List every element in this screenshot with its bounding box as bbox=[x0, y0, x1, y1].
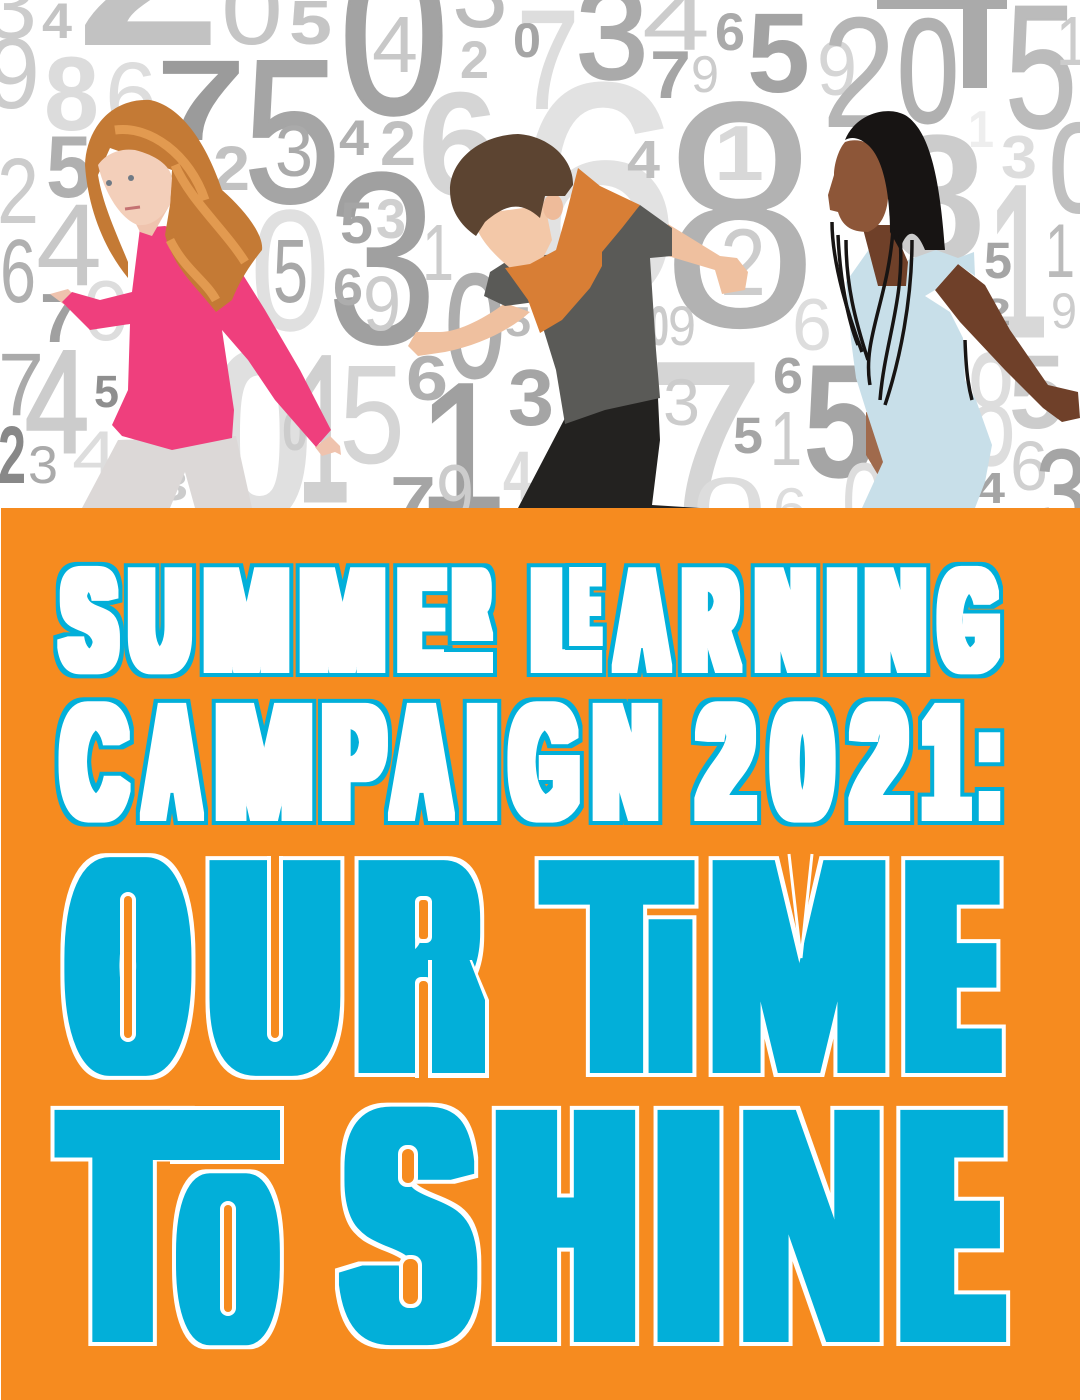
orange scarf bbox=[505, 168, 640, 333]
photo background: scattered numbers: 6 bbox=[333, 259, 363, 317]
white leggings bbox=[82, 436, 252, 508]
title: To Shine: O bbox=[190, 1132, 266, 1385]
heading line: Campaign 2021:: N bbox=[595, 672, 656, 851]
heading line: Summer Learning: R bbox=[457, 551, 486, 658]
photo background: scattered numbers bbox=[0, 0, 1080, 572]
photo background: scattered numbers: 5 bbox=[984, 232, 1012, 289]
photo background: scattered numbers: 8 bbox=[890, 98, 985, 299]
photo background: scattered numbers: 7 bbox=[650, 316, 762, 568]
heading line: Campaign 2021:: 2 bbox=[853, 672, 906, 851]
right hand bbox=[315, 436, 341, 456]
photo background: scattered numbers: 4 bbox=[372, 0, 418, 89]
photo background: scattered numbers: 6 bbox=[0, 222, 36, 322]
neck bbox=[128, 208, 168, 236]
heading line: Campaign 2021:: I bbox=[468, 672, 496, 851]
hand with ribbon bbox=[866, 412, 892, 475]
heading line: Summer Learning: M bbox=[301, 541, 384, 700]
title: To Shine: I bbox=[664, 1046, 714, 1400]
photo background: scattered numbers: 9 bbox=[691, 46, 719, 104]
heading line: Summer Learning: I bbox=[828, 541, 856, 700]
photo background: scattered numbers: 3 bbox=[275, 112, 313, 192]
photo background: scattered numbers: 7 bbox=[156, 37, 246, 165]
photo background: scattered numbers: 3 bbox=[327, 121, 437, 395]
title: Our Time: U bbox=[218, 803, 332, 1129]
photo background: scattered numbers: 4 bbox=[72, 417, 118, 493]
pink top and sleeves bbox=[62, 226, 331, 450]
child: girl in pink bbox=[50, 100, 341, 508]
title: Our Time bbox=[77, 803, 988, 1129]
photo background: scattered numbers: 5 bbox=[733, 407, 763, 464]
mouth and eyes bbox=[106, 175, 140, 209]
title: To Shine: T bbox=[71, 1046, 175, 1400]
photo background: scattered numbers: 6 bbox=[1010, 427, 1048, 505]
photo background: scattered numbers: 5 bbox=[1009, 334, 1065, 451]
photo background: scattered numbers: 9 bbox=[1051, 283, 1077, 339]
photo background: scattered numbers: 0 bbox=[83, 264, 129, 359]
heading line: Campaign 2021:: A bbox=[394, 672, 449, 851]
heading line: Summer Learning: R bbox=[685, 541, 736, 700]
photo background: scattered numbers: 8 bbox=[966, 319, 1016, 500]
hair highlights bbox=[115, 129, 245, 300]
heading line: Summer Learning: L bbox=[532, 541, 598, 700]
title: Summer Learning Campaign 2021 bbox=[63, 541, 996, 851]
photo background: scattered numbers: 3 bbox=[158, 462, 188, 509]
heading line: Campaign 2021: bbox=[63, 672, 996, 851]
photo background: scattered numbers: 2 bbox=[720, 210, 766, 316]
photo background: scattered numbers: 0 bbox=[205, 298, 315, 572]
loose braids bbox=[832, 222, 972, 405]
photo background: scattered numbers: 6 bbox=[418, 62, 498, 227]
photo background: scattered numbers: 5 bbox=[243, 17, 341, 246]
photo background: scattered numbers: 3 bbox=[28, 436, 58, 495]
photo background: scattered numbers: 0 bbox=[513, 14, 541, 68]
photo background: scattered numbers: 5 bbox=[803, 331, 875, 512]
photo background: scattered numbers: 5 bbox=[505, 298, 531, 345]
heading line: Summer Learning: A bbox=[618, 541, 666, 700]
photo background: scattered numbers: 5 bbox=[340, 191, 373, 256]
photo background: scattered numbers: 4 bbox=[36, 179, 102, 310]
photo background: scattered numbers: 6 bbox=[715, 3, 745, 62]
photo background: scattered numbers: 5 bbox=[94, 366, 119, 417]
grey t-shirt bbox=[484, 205, 672, 424]
arm bbox=[935, 264, 1080, 422]
photo background: scattered numbers: 1 bbox=[418, 346, 506, 552]
brown hair bbox=[450, 134, 573, 236]
heading line: Campaign 2021:: M bbox=[216, 672, 312, 851]
child: girl with braids bbox=[828, 111, 1080, 508]
photo background: scattered numbers: 7 bbox=[390, 462, 436, 540]
photo background: scattered numbers: 4 bbox=[339, 110, 369, 166]
left hand bbox=[50, 289, 76, 306]
heading line: Summer Learning: M bbox=[205, 541, 288, 700]
face bbox=[472, 205, 552, 268]
left arm and fist bbox=[408, 303, 530, 356]
heading line: Summer Learning: N bbox=[868, 541, 924, 700]
photo background: scattered numbers: 0 bbox=[649, 294, 669, 357]
photo background: scattered numbers: 6 bbox=[515, 19, 680, 366]
heading line: Summer Learning: E bbox=[575, 549, 596, 664]
photo background: scattered numbers: 8 bbox=[44, 36, 99, 153]
photo background: scattered numbers: 2 bbox=[983, 292, 1011, 334]
photo background: scattered numbers: 1 bbox=[298, 313, 350, 544]
photo background: scattered numbers: 6 bbox=[773, 476, 807, 543]
photo background: scattered numbers: 3 bbox=[1001, 124, 1037, 191]
neck and chest bbox=[862, 225, 908, 286]
face bbox=[828, 140, 888, 232]
photo background: scattered numbers: 9 bbox=[363, 259, 401, 347]
heading line: Campaign 2021:: 0 bbox=[773, 672, 832, 851]
photo background: scattered numbers: 5 bbox=[339, 335, 405, 493]
photo background: scattered numbers: 4 bbox=[25, 320, 89, 483]
heading line: Summer Learning: E bbox=[401, 541, 443, 700]
title: Our Time: R bbox=[367, 803, 470, 1129]
photo background: scattered numbers: 0 bbox=[250, 173, 330, 367]
title: Our Time: M bbox=[708, 803, 890, 1129]
heading line: Campaign 2021:: C bbox=[63, 672, 125, 851]
heading line: Campaign 2021:: 1 bbox=[925, 672, 966, 851]
black braids cap bbox=[845, 111, 945, 250]
title: To Shine: H bbox=[502, 1046, 629, 1400]
ear bbox=[543, 194, 563, 220]
title: To Shine: S bbox=[352, 1046, 466, 1400]
large T-shaped numeral, top right bbox=[877, 0, 1007, 88]
photo background: scattered numbers: 7 bbox=[40, 279, 78, 357]
title: To Shine bbox=[71, 1046, 993, 1400]
photo background: scattered numbers: 6 bbox=[105, 43, 157, 149]
photo background: scattered numbers: 6 bbox=[406, 344, 448, 414]
photo background: scattered numbers: 0 bbox=[842, 441, 886, 564]
heading line: Summer Learning: S bbox=[63, 541, 115, 700]
child: boy with orange scarf bbox=[408, 134, 748, 508]
photo background: scattered numbers: 4 bbox=[503, 437, 533, 515]
text: G bbox=[942, 541, 996, 700]
title: Our Time: O bbox=[77, 803, 179, 1129]
photo background: scattered numbers: 9 bbox=[817, 26, 857, 112]
photo background: scattered numbers: 1 bbox=[422, 208, 454, 297]
photo background: scattered numbers: 4 bbox=[976, 464, 1006, 513]
photo background: scattered numbers: 5 bbox=[273, 222, 308, 322]
photo background: scattered numbers: 0 bbox=[445, 244, 505, 409]
right arm and fist bbox=[668, 224, 748, 294]
photo background: scattered numbers: 1 bbox=[968, 101, 994, 159]
photo background: scattered numbers: 3 bbox=[376, 187, 406, 250]
photo background: scattered numbers: 4 bbox=[627, 130, 660, 190]
photo background: scattered numbers: 1 bbox=[770, 396, 802, 482]
photo background: scattered numbers: 0 bbox=[692, 460, 766, 560]
photo background: scattered numbers: 7 bbox=[650, 37, 691, 113]
photo background: scattered numbers: 6 bbox=[792, 285, 832, 366]
title: To Shine: N bbox=[740, 1046, 883, 1400]
heading line: Summer Learning: U bbox=[131, 541, 189, 700]
black trousers bbox=[518, 398, 700, 508]
photo background: scattered numbers: 5 bbox=[46, 117, 92, 216]
heading line: Summer Learning: N bbox=[758, 541, 814, 700]
photo background: scattered numbers: 6 bbox=[773, 347, 803, 404]
orange panel bbox=[1, 508, 1080, 1400]
photo background: scattered numbers: 8 bbox=[662, 36, 818, 395]
photo background: scattered numbers: 0 bbox=[282, 399, 308, 462]
photo background: scattered numbers: 2 bbox=[380, 109, 416, 179]
title: Our Time: T bbox=[546, 803, 687, 1129]
photo background: scattered numbers: 3 bbox=[663, 365, 700, 439]
heading line: Summer Learning bbox=[63, 541, 996, 700]
heading line: Campaign 2021:: P bbox=[324, 672, 383, 851]
photo background: scattered numbers: 9 bbox=[436, 448, 474, 537]
denim jumpsuit bbox=[846, 248, 992, 508]
heading line: Campaign 2021:: G bbox=[512, 672, 577, 851]
photo background: scattered numbers: 2 bbox=[460, 31, 489, 90]
heading line: Campaign 2021:: 2 bbox=[699, 672, 753, 851]
face bbox=[98, 150, 172, 225]
heading line: Campaign 2021:: A bbox=[146, 672, 198, 851]
photo background: scattered numbers: 2 bbox=[213, 134, 250, 204]
title: Our Time: I bbox=[648, 881, 694, 1111]
photo background: scattered numbers: 9 bbox=[668, 294, 696, 357]
text: : bbox=[983, 672, 996, 851]
photo background: scattered numbers: 3 bbox=[508, 353, 554, 442]
red hair back bbox=[85, 100, 262, 312]
photo background: scattered numbers: 1 bbox=[714, 109, 764, 197]
